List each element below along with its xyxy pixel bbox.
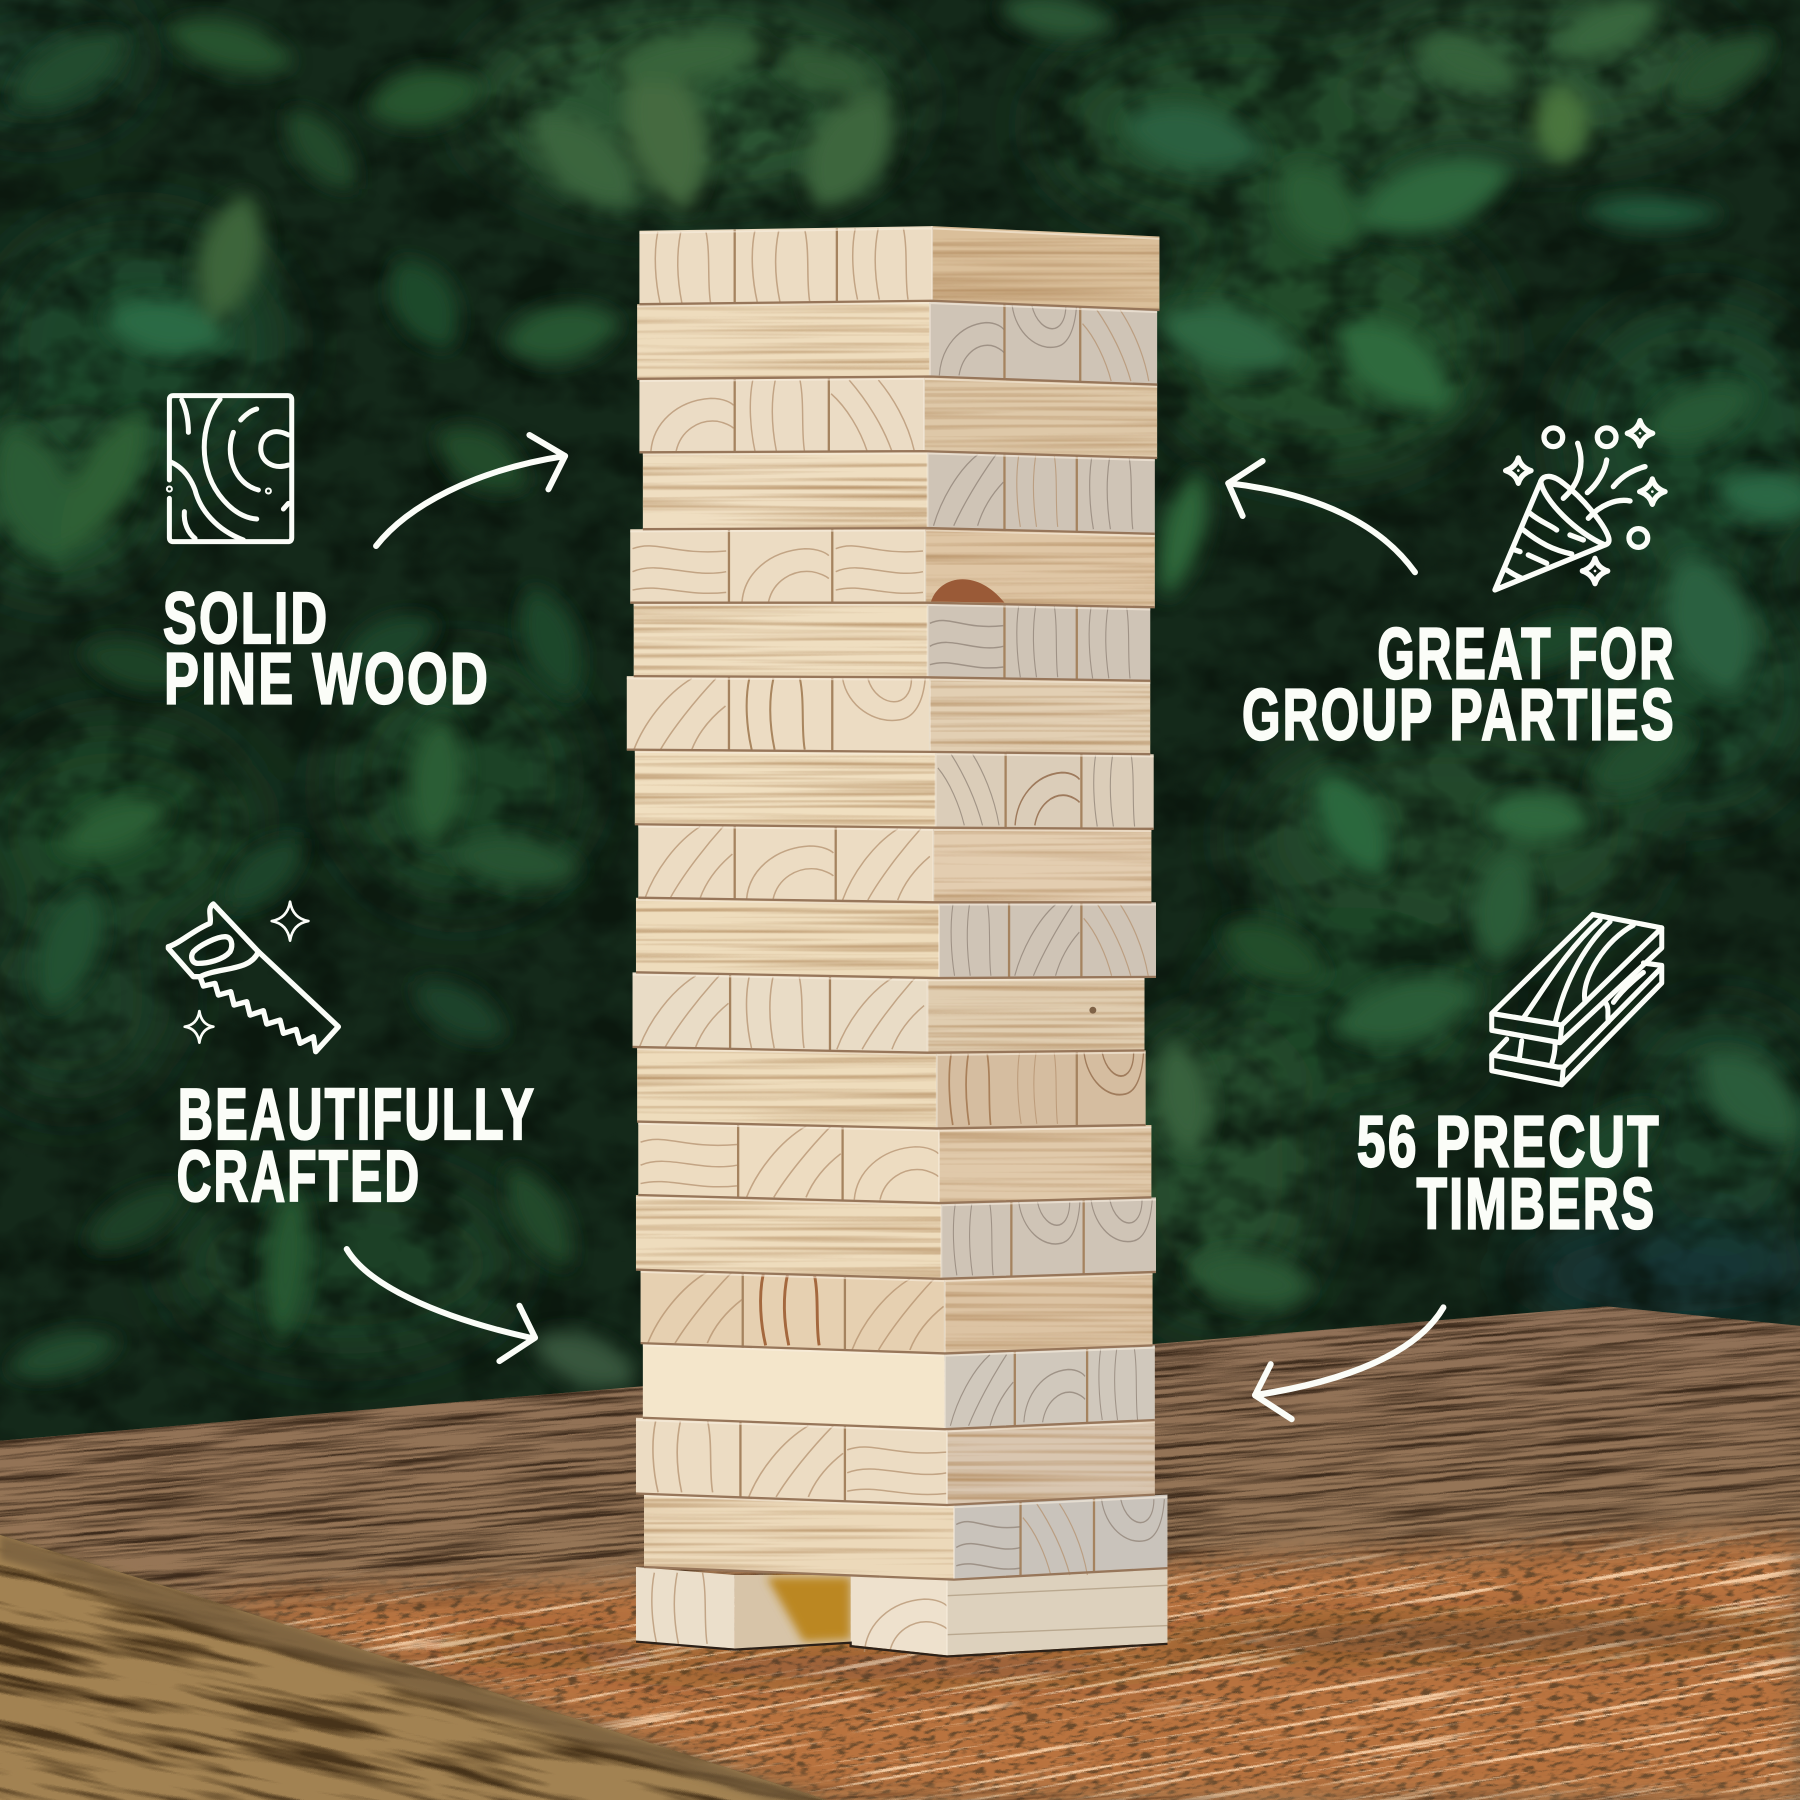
callout: great for group parties <box>1228 421 1676 755</box>
row 15 <box>641 1270 1153 1353</box>
row 1 top <box>639 226 1159 310</box>
icon: wood slab <box>168 396 292 542</box>
row 2 <box>637 301 1157 385</box>
row 5 with knot <box>630 528 1155 607</box>
row 16 <box>643 1343 1155 1429</box>
heading: great for group parties <box>1242 614 1676 755</box>
heading: beautifully crafted: BEAUTIFULLY <box>178 1075 536 1155</box>
row 18 <box>644 1493 1167 1580</box>
row 7 <box>627 676 1150 754</box>
wooden table <box>0 1306 1800 1800</box>
callout: beautifully crafted <box>168 902 536 1361</box>
row 14 <box>636 1195 1156 1279</box>
row 11 <box>633 972 1145 1053</box>
arrow to tower upper left <box>376 435 565 546</box>
heading: 56 precut timbers: TIMBERS <box>1417 1164 1657 1244</box>
base row with legs <box>636 1567 1167 1657</box>
row 6 <box>634 603 1150 681</box>
heading: beautifully crafted: CRAFTED <box>177 1137 421 1217</box>
row 8 <box>635 750 1154 829</box>
arrow to tower lower right <box>1255 1307 1443 1419</box>
heading: solid pine wood: SOLID <box>163 579 329 659</box>
heading: 56 precut timbers: 56 PRECUT <box>1357 1102 1661 1182</box>
row 12 <box>637 1047 1146 1128</box>
callout: solid pine wood <box>163 396 565 720</box>
row 4 <box>643 451 1155 534</box>
heading: solid pine wood <box>163 579 490 720</box>
arrow to tower lower left <box>347 1249 535 1361</box>
row 3 <box>639 377 1157 458</box>
heading: 56 precut timbers <box>1357 1102 1661 1244</box>
row 10 <box>636 898 1156 978</box>
icon: hand saw with sparkles <box>168 902 338 1052</box>
callout: 56 precut timbers <box>1255 915 1662 1419</box>
row 9 <box>638 824 1151 902</box>
row 17 <box>636 1418 1155 1505</box>
jenga tower <box>627 226 1167 1657</box>
heading: solid pine wood: PINE WOOD <box>164 640 490 720</box>
arrow to tower upper right <box>1228 461 1415 572</box>
icon: party popper <box>1495 421 1665 590</box>
row 13 <box>638 1122 1151 1203</box>
heading: beautifully crafted <box>177 1075 536 1217</box>
icon: stacked timber planks <box>1492 915 1662 1085</box>
